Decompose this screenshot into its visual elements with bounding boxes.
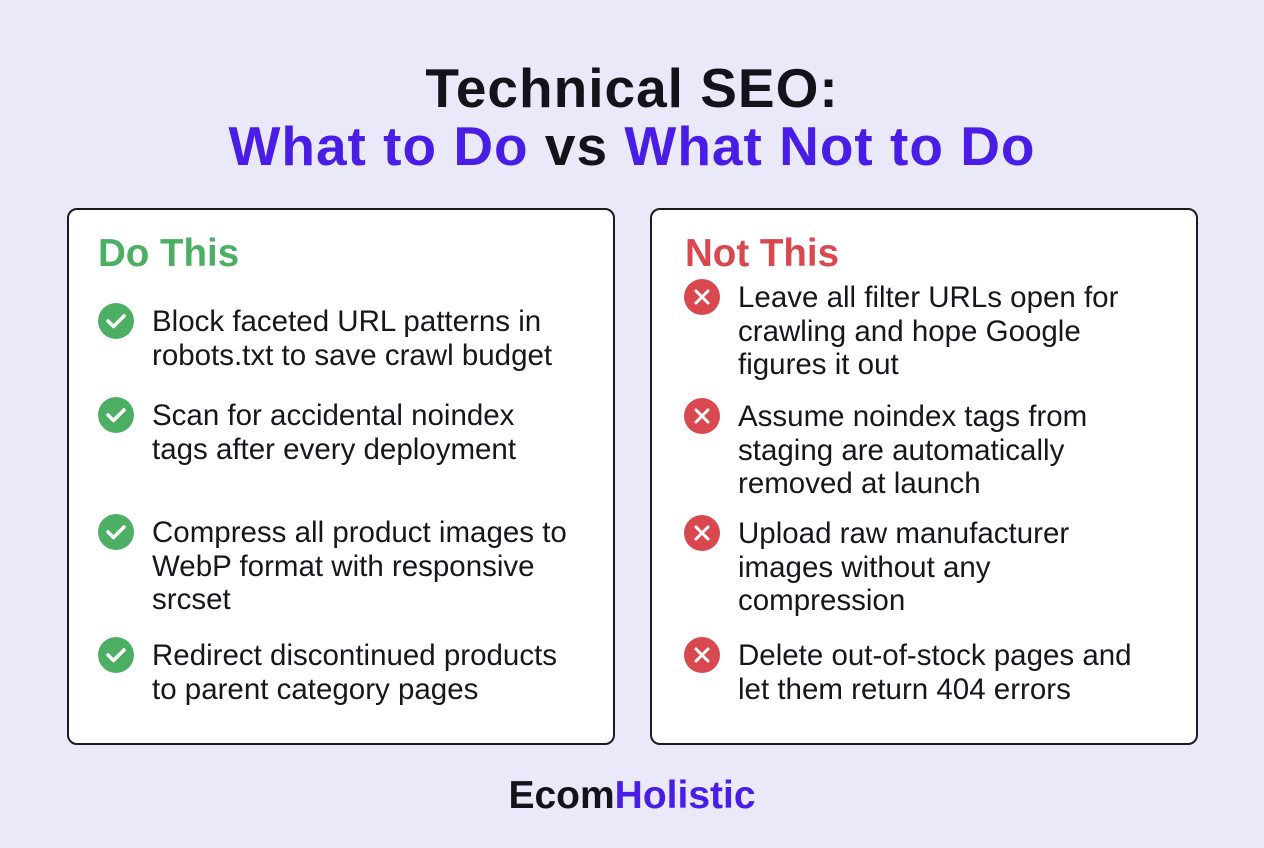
list: do items: to parent category pages — [152, 672, 478, 706]
list: do items: Block faceted URL patterns in — [152, 305, 541, 338]
footer logo: EcomHolistic — [508, 774, 756, 817]
list: not items: images without any — [738, 550, 991, 584]
panel: not this — [650, 208, 1198, 745]
list: do items: WebP format with responsive — [152, 550, 535, 582]
list: not items: Upload raw manufacturer — [738, 517, 1069, 550]
list: do items: Redirect discontinued products — [152, 639, 557, 672]
list: do items: Compress all product images to — [152, 516, 567, 549]
list: do items — [98, 303, 567, 706]
list: do items: robots.txt to save crawl budget — [152, 338, 552, 372]
panel: do this — [67, 208, 615, 745]
list: not items: crawling and hope Google — [738, 314, 1081, 348]
list: not items: Delete out-of-stock pages and — [738, 639, 1132, 672]
list: not items — [684, 279, 1132, 706]
title: Technical SEO: — [425, 57, 839, 119]
list: not items: Leave all filter URLs open for — [738, 281, 1118, 314]
list: do items: srcset — [152, 583, 231, 616]
list: not items: compression — [738, 584, 905, 617]
list: not items: figures it out — [738, 348, 899, 381]
list: not items: Assume noindex tags from — [738, 400, 1087, 433]
list: do items: tags after every deployment — [152, 432, 516, 466]
list: not items: staging are automatically — [738, 434, 1064, 466]
list: do items: Scan for accidental noindex — [152, 399, 514, 432]
heading: not this: Not This — [685, 232, 839, 275]
title — [228, 57, 1036, 177]
list: not items: let them return 404 errors — [738, 672, 1071, 706]
heading: do this: Do This — [98, 232, 239, 275]
list: not items: removed at launch — [738, 467, 981, 500]
title: What to Do vs What Not to Do — [228, 115, 1036, 177]
